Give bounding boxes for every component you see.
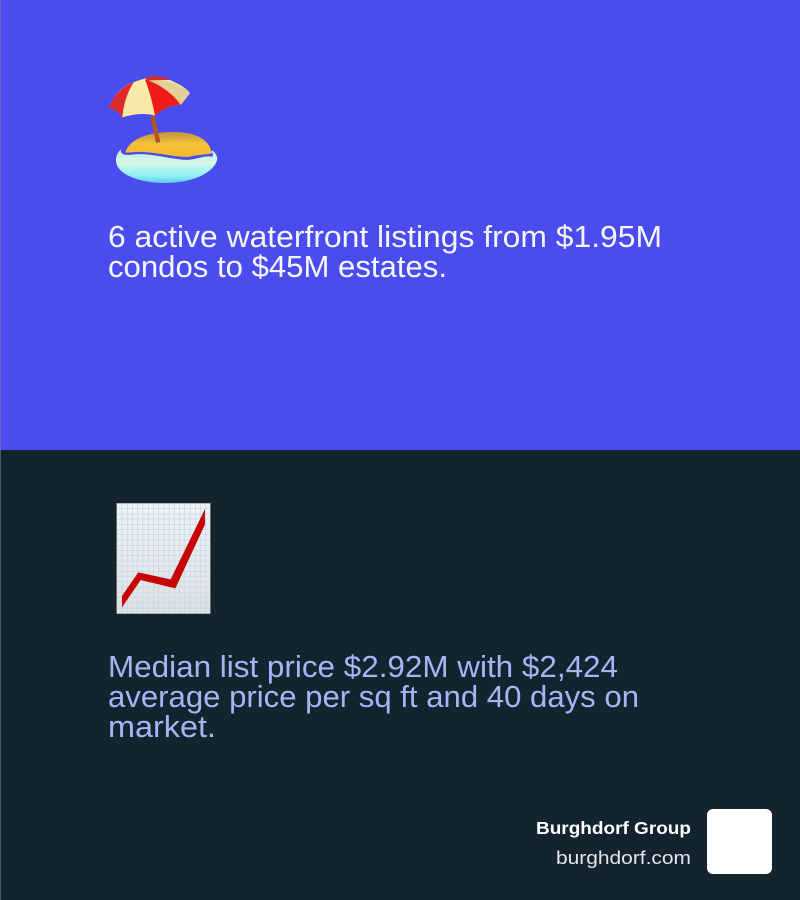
text: listings statement: condos to $45M estates.: [108, 249, 447, 284]
umbrella canopy: [109, 76, 190, 117]
icon: beach umbrella on island: [109, 76, 217, 183]
text: market statement: Median list price $2.92M with $2,424: [108, 649, 618, 684]
panel: waterfront listings: [0, 0, 800, 450]
text: listings statement: 6 active waterfront listings from $1.95M: [108, 219, 662, 254]
text: listings statement: [108, 219, 662, 284]
footer: logo tile: [707, 809, 772, 874]
footer: brand name: Burghdorf Group: [536, 818, 691, 838]
text: market statement: [108, 649, 639, 744]
text: market statement: average price per sq ft and 40 days on: [108, 679, 639, 714]
footer: website: burghdorf.com: [556, 847, 691, 868]
panel: market statistics: [0, 450, 800, 900]
icon: chart with upward trend: [117, 503, 210, 614]
text: market statement: market.: [108, 709, 216, 744]
